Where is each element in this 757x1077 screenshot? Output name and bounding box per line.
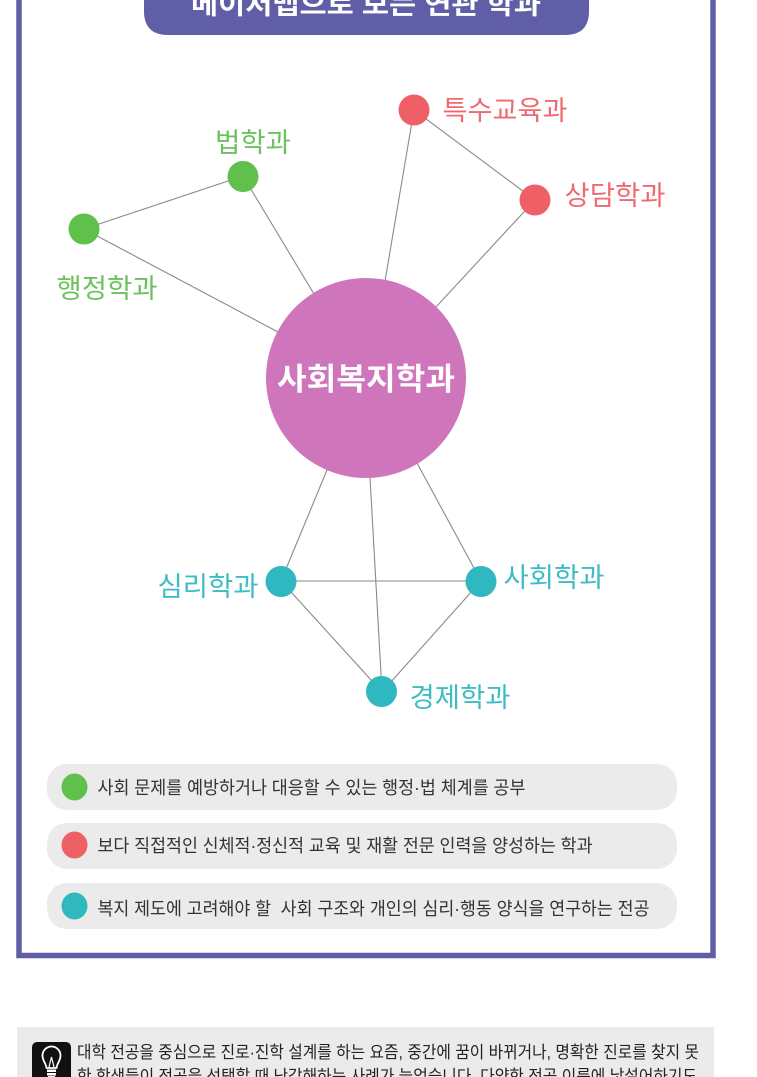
node: sociology [466,563,604,597]
node: sociology: 사회학과 [504,563,604,593]
node: counseling: 상담학과 [564,181,666,211]
node: economics [366,676,510,713]
node: law [215,128,291,192]
node: counseling [520,181,666,216]
node: special education: 특수교육과 [442,96,568,126]
node: public administration [56,214,158,304]
central node: social welfare [266,278,466,478]
legend: red group: 보다 직접적인 신체적·정신적 교육 및 재활 전문 인력을 양성하는 학과 [98,836,592,856]
icon: light bulb [32,1042,71,1077]
legend: teal group: 복지 제도에 고려해야 할 사회 구조와 개인의 심리·행동 양식을 연구하는 전공 [98,899,650,919]
legend: teal group [47,883,677,929]
central node: social welfare: 사회복지학과 [277,362,455,397]
node: psychology: 심리학과 [158,572,258,602]
legend: green group: 사회 문제를 예방하거나 대응할 수 있는 행정·법 체계를 공부 [98,778,526,798]
connecting lines [84,110,535,692]
node: economics: 경제학과 [410,683,510,713]
panel: tip note [17,1027,714,1077]
node: psychology [158,566,296,602]
legend: red group [47,823,677,869]
node: law: 법학과 [215,128,291,158]
chart: network of related majors [56,94,666,713]
node: special education [398,94,568,126]
legend: green group [47,764,677,810]
node: public administration: 행정학과 [56,274,158,304]
body text: 대학 전공을 중심으로 진로·진학 설계를 하는 요즘, 중간에 꿈이 바뀌거나, 명확한 진로를 찾지 못 [77,1043,699,1062]
heading: related majors banner [144,0,589,35]
